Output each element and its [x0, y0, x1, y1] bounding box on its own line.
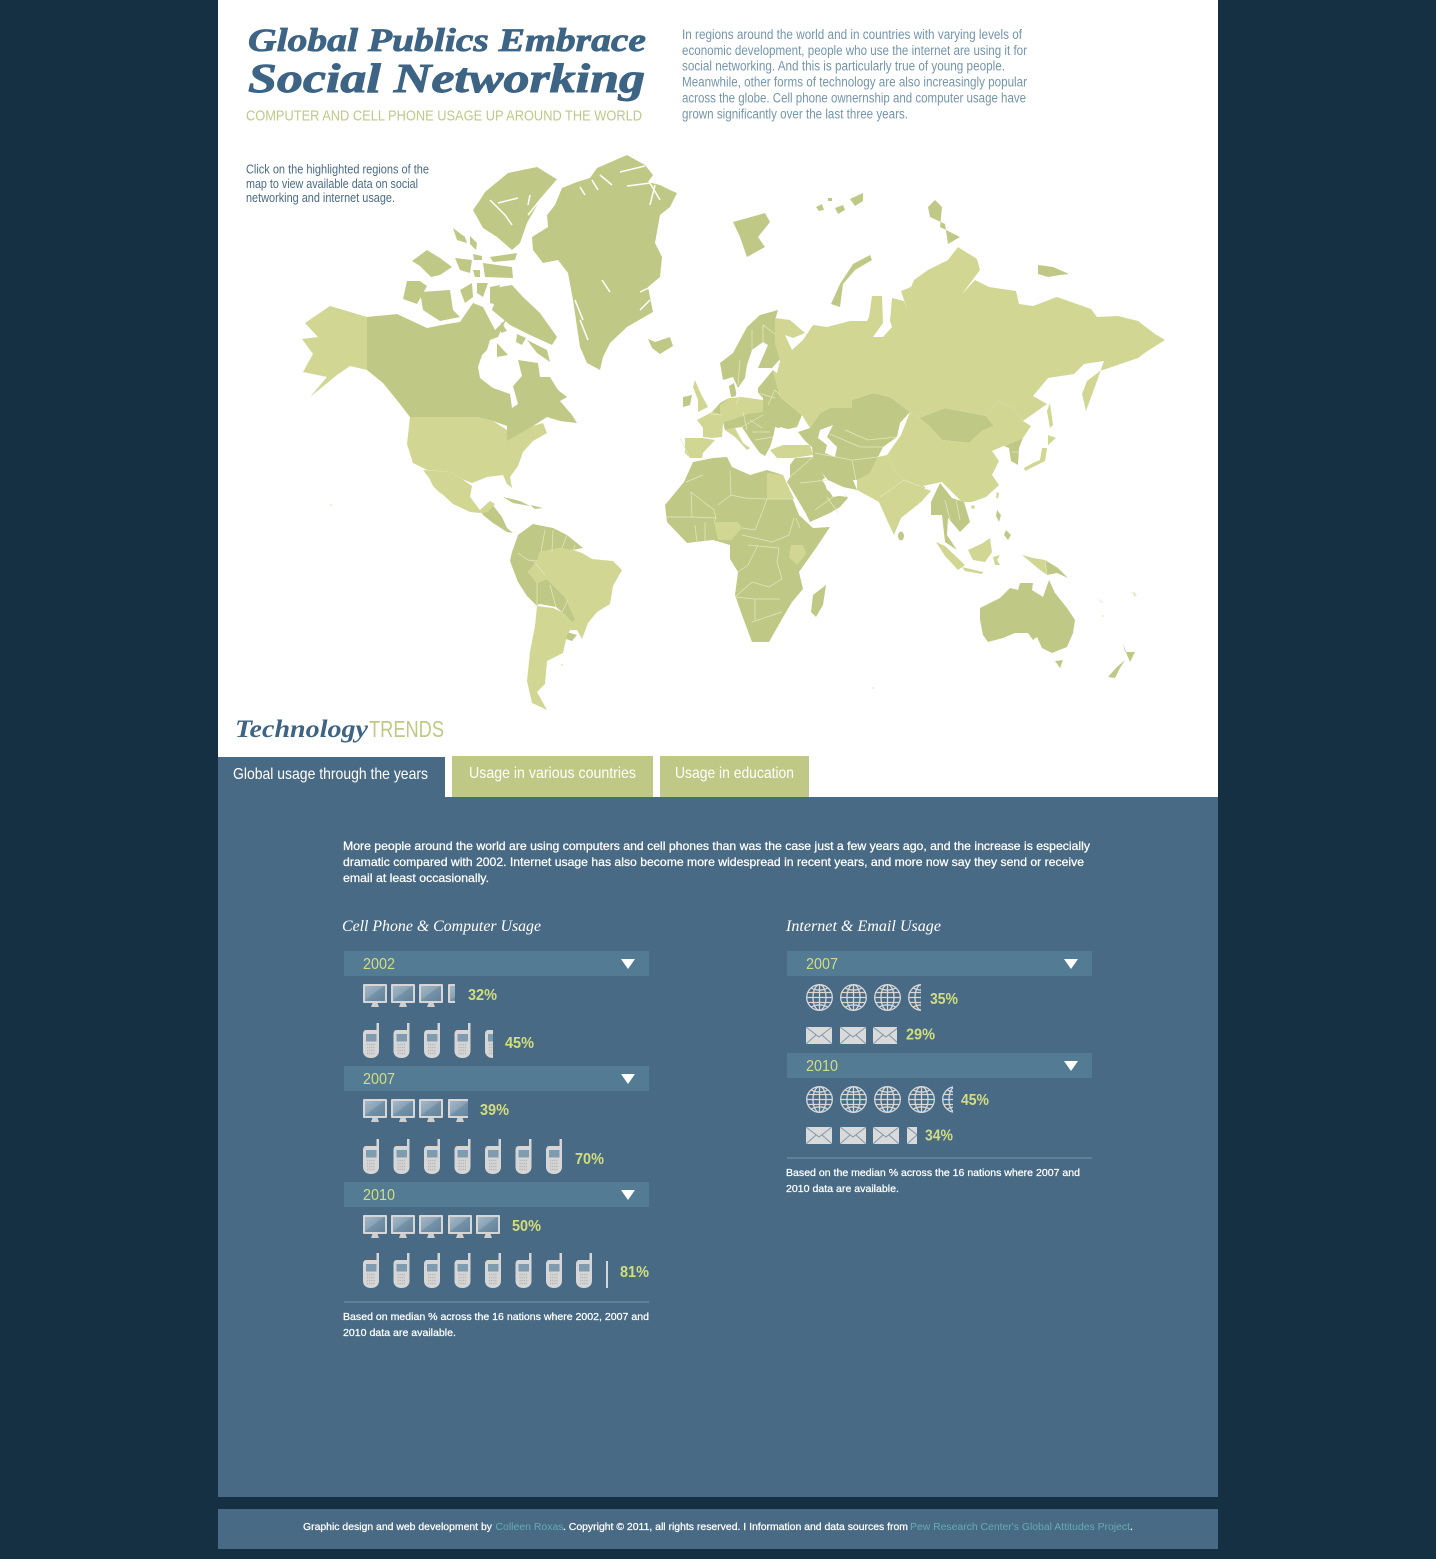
email 2007: [806, 1026, 935, 1044]
footnote: Based on median % across the 16 nations where 2002, 2007 and: [343, 1311, 649, 1323]
panel intro text: [343, 839, 1090, 885]
year bar 2007: 2007: [363, 1071, 395, 1088]
kenya: [789, 545, 806, 565]
year bar 2007: 2007: [806, 956, 838, 973]
phones 2010: [363, 1253, 649, 1288]
nepal: [904, 480, 925, 491]
baltic sea: [735, 368, 773, 398]
eastern europe: [735, 370, 802, 453]
denmark: [729, 383, 737, 397]
turkey: [770, 445, 813, 458]
intro text: economic development, people who use the internet are using it for: [682, 43, 1027, 58]
year bar 2010: 2010: [363, 1187, 395, 1204]
world map: [302, 155, 1165, 710]
computers 2002: [363, 984, 497, 1007]
intro text: grown significantly over the last three years.: [682, 106, 908, 121]
mexico: [423, 470, 495, 513]
new zealand: [1108, 643, 1135, 678]
central america: [480, 501, 513, 533]
section heading: [235, 716, 444, 743]
south asia: [857, 455, 931, 535]
iceland: [648, 337, 673, 354]
internet 2007: [807, 985, 958, 1010]
dark regions: [367, 155, 1135, 678]
footer: [218, 1509, 1218, 1549]
central europe: [723, 412, 763, 430]
footer: Pew Research Center's Global Attitudes Project: [910, 1521, 1130, 1533]
black sea: [775, 425, 807, 445]
phones 2007: 70%: [575, 1151, 604, 1168]
canada: [367, 303, 577, 441]
active tab: Global usage through the years: [233, 766, 428, 783]
email 2010: 34%: [925, 1128, 953, 1144]
intro text: In regions around the world and in countries with varying levels of: [682, 27, 1022, 42]
severnaya zemlya: [928, 200, 960, 244]
sumatra: [936, 542, 965, 570]
panel intro text: email at least occasionally.: [343, 871, 489, 885]
indonesian new guinea: [1022, 555, 1047, 575]
tab 2: [452, 756, 653, 797]
light regions: [302, 247, 1165, 710]
panel intro text: More people around the world are using computers and cell phones than was the case just a few years ago, and the increase is especially: [343, 839, 1090, 853]
title: Social Networking: [248, 55, 645, 101]
madagascar: [811, 585, 826, 617]
computers 2002: 32%: [468, 987, 497, 1004]
email 2007: 29%: [906, 1026, 935, 1044]
java: [962, 567, 983, 574]
africa: [665, 457, 830, 642]
computers 2007: [363, 1099, 509, 1122]
greenland and arctic fjords: [490, 166, 660, 340]
korea: [1004, 438, 1023, 465]
subtitle: COMPUTER AND CELL PHONE USAGE UP AROUND THE WORLD: [246, 108, 642, 124]
baja california: [427, 473, 442, 495]
footer: .: [1130, 1521, 1133, 1533]
right column: internet and email usage: [785, 918, 1092, 1195]
caribbean: [503, 497, 543, 509]
footnote: Based on the median % across the 16 nations where 2007 and: [786, 1167, 1080, 1179]
taiwan and hainan: [971, 492, 999, 509]
computers 2010: 50%: [512, 1218, 541, 1235]
philippines: [996, 510, 1011, 540]
central asia and iran: [798, 393, 910, 490]
novaya zemlya: [831, 255, 872, 307]
intro text: Meanwhile, other forms of technology are also increasingly popular: [682, 74, 1027, 90]
left column: cell phone and computer usage: [342, 918, 649, 1339]
footnote: [786, 1167, 1080, 1195]
argentina and chile: [527, 606, 574, 710]
year bar 2007: [344, 1066, 649, 1091]
tab 2: Usage in various countries: [469, 765, 636, 782]
balkans: [742, 425, 775, 456]
svalbard: [733, 213, 770, 257]
borneo: [968, 538, 992, 562]
internet 2010: 45%: [961, 1092, 989, 1109]
inland seas: [735, 368, 846, 497]
computers 2010: [363, 1215, 541, 1238]
computers 2007: 39%: [480, 1102, 509, 1119]
year bar 2002: 2002: [363, 956, 395, 973]
mongolia: [919, 408, 994, 443]
email 2010: [806, 1127, 953, 1144]
papua new guinea: [1045, 560, 1068, 578]
uk: [693, 380, 708, 412]
year bar 2010: [344, 1182, 649, 1207]
new siberian: [1038, 265, 1069, 277]
main panel: [218, 797, 1218, 1497]
active tab: [218, 757, 445, 798]
footnote: [343, 1311, 649, 1339]
uruguay: [566, 632, 577, 641]
footer: Graphic design and web development by: [303, 1521, 493, 1533]
scandinavia: [720, 310, 782, 388]
australia: [980, 580, 1075, 653]
title: [248, 23, 646, 101]
intro text: social networking. And this is particularly true of young people.: [682, 59, 1005, 74]
arabia: [787, 457, 850, 522]
title: Global Publics Embrace: [248, 23, 646, 59]
china: [887, 401, 1031, 502]
intro text: across the globe. Cell phone ownernship and computer usage have: [682, 90, 1026, 106]
footnote: 2010 data are available.: [786, 1183, 899, 1195]
usa: [407, 417, 547, 488]
caspian sea: [818, 425, 837, 457]
spain: [685, 438, 715, 458]
intro text: [682, 27, 1027, 121]
year bar 2010: 2010: [806, 1058, 838, 1075]
low countries: [712, 398, 729, 415]
borders: [518, 325, 1047, 622]
tab 3: [660, 756, 809, 797]
sakhalin and japan: [1024, 403, 1056, 471]
sri lanka: [898, 532, 904, 540]
heading: Internet & Email Usage: [785, 918, 941, 935]
ireland: [683, 395, 692, 407]
egypt: [767, 473, 794, 499]
phones 2002: [363, 1023, 534, 1058]
russia: [773, 247, 1165, 428]
footnote: 2010 data are available.: [343, 1327, 456, 1339]
phones 2002: 45%: [505, 1035, 534, 1052]
footer: Colleen Roxas: [496, 1521, 564, 1533]
panel intro text: dramatic compared with 2002. Internet usage has also become more widespread in recent years, and more now say they send or receive: [343, 855, 1084, 869]
phones 2007: [363, 1139, 604, 1174]
year bar 2002: [344, 951, 649, 976]
nigeria: [714, 522, 742, 540]
heading: Cell Phone & Computer Usage: [342, 918, 541, 935]
section heading: Technology: [235, 716, 369, 743]
internet 2007: 35%: [930, 991, 958, 1008]
persian gulf: [823, 478, 846, 497]
tasmania: [1055, 660, 1063, 668]
northern south america: [510, 524, 583, 624]
map instruction: Click on the highlighted regions of the: [246, 162, 429, 176]
map instruction: map to view available data on social: [246, 177, 418, 191]
sulawesi: [993, 555, 1000, 565]
internet 2010: [807, 1087, 989, 1112]
france: [697, 412, 723, 438]
germany and poland: [720, 397, 763, 422]
tab 3: Usage in education: [675, 765, 794, 782]
brazil: [528, 548, 622, 639]
section heading: TRENDS: [369, 716, 444, 742]
italy: [725, 428, 750, 450]
faint islands: [330, 504, 1136, 689]
franz josef: [816, 193, 863, 214]
map instruction: networking and internet usage.: [246, 191, 395, 205]
year bar 2007: [787, 951, 1092, 976]
year bar 2010: [787, 1053, 1092, 1078]
canadian arctic islands: [403, 167, 558, 362]
alaska: [302, 306, 367, 397]
greenland: [532, 155, 677, 370]
map instruction: [246, 162, 429, 205]
southeast asia: [931, 483, 970, 550]
footer: . Copyright © 2011, all rights reserved. I Information and data sources from: [563, 1521, 908, 1533]
phones 2010: 81%: [620, 1264, 649, 1281]
